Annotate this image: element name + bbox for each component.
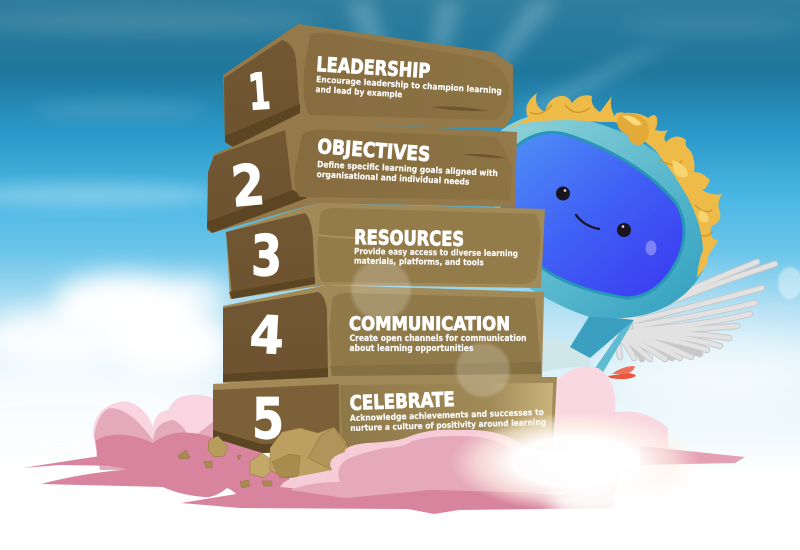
screen xyxy=(500,133,684,298)
neck xyxy=(570,315,634,358)
far cloud light rim xyxy=(93,395,225,470)
description: Create open channels for communication xyxy=(350,334,526,344)
mascot character xyxy=(495,114,708,379)
description xyxy=(315,75,502,107)
heading: LEADERSHIP xyxy=(316,52,431,83)
description: nurture a culture of positivity around learning xyxy=(350,418,546,434)
heading: CELEBRATE xyxy=(349,387,455,415)
block 3: resources xyxy=(226,203,545,299)
arrow tail xyxy=(608,366,636,379)
description: and lead by example xyxy=(315,85,403,100)
rock rubble xyxy=(178,427,568,488)
thin left band xyxy=(23,456,130,468)
front cloud dark base xyxy=(181,470,620,514)
description xyxy=(316,160,498,189)
pink cloud in front of tower xyxy=(181,430,640,514)
left cloud dark mass xyxy=(41,433,300,498)
description: organisational and individual needs xyxy=(316,170,470,188)
front cloud mid tone xyxy=(290,436,600,498)
description xyxy=(350,334,526,354)
far cloud mid tone xyxy=(94,408,225,470)
description xyxy=(354,247,518,269)
number: 1 xyxy=(246,62,272,122)
right eye xyxy=(617,223,631,237)
heading: COMMUNICATION xyxy=(349,313,510,335)
side face xyxy=(223,292,328,382)
block body xyxy=(207,125,517,233)
number: 2 xyxy=(229,153,267,220)
front face xyxy=(340,383,553,447)
description: materials, platforms, and tools xyxy=(354,256,484,268)
description: Acknowledge achievements and successes to xyxy=(350,408,544,424)
block 2: objectives xyxy=(207,125,517,233)
side face xyxy=(213,384,340,450)
mascot wing xyxy=(612,262,775,359)
side face xyxy=(207,130,293,228)
smile xyxy=(576,215,599,229)
description: Encourage leadership to champion learning xyxy=(316,75,502,97)
front face xyxy=(318,208,540,284)
side face xyxy=(226,213,315,297)
front face xyxy=(295,130,512,200)
heading: RESOURCES xyxy=(354,225,464,251)
number: 3 xyxy=(251,224,282,289)
number: 5 xyxy=(252,387,284,452)
front cloud light rim xyxy=(280,430,640,495)
front face xyxy=(329,293,541,375)
block body xyxy=(213,377,557,453)
mascot golden hair xyxy=(505,93,722,278)
pink cloud ground xyxy=(23,433,745,498)
left eye xyxy=(556,186,570,200)
block body xyxy=(223,285,544,383)
heading: OBJECTIVES xyxy=(317,134,431,166)
block 4: communication xyxy=(223,285,544,383)
neck highlight xyxy=(593,320,634,374)
right thin band xyxy=(640,446,745,465)
lens flares xyxy=(349,258,512,399)
fluffy white clouds xyxy=(0,274,230,380)
right back cloud xyxy=(555,367,668,458)
block body xyxy=(223,24,513,148)
front face xyxy=(304,33,509,120)
head xyxy=(495,114,708,318)
cheek highlight xyxy=(646,240,656,256)
pink cloud behind tower xyxy=(93,367,668,470)
description: Provide easy access to diverse learning xyxy=(354,247,518,259)
pale feather behind body xyxy=(543,338,590,372)
description xyxy=(350,408,546,434)
block body xyxy=(226,203,545,299)
white light glow xyxy=(0,412,800,550)
block 1: leadership xyxy=(223,24,513,148)
description: about learning opportunities xyxy=(350,344,474,354)
number: 4 xyxy=(248,305,285,367)
block 5: celebrate xyxy=(213,377,557,453)
side face xyxy=(224,40,300,146)
description: Define specific learning goals aligned with xyxy=(317,160,498,179)
